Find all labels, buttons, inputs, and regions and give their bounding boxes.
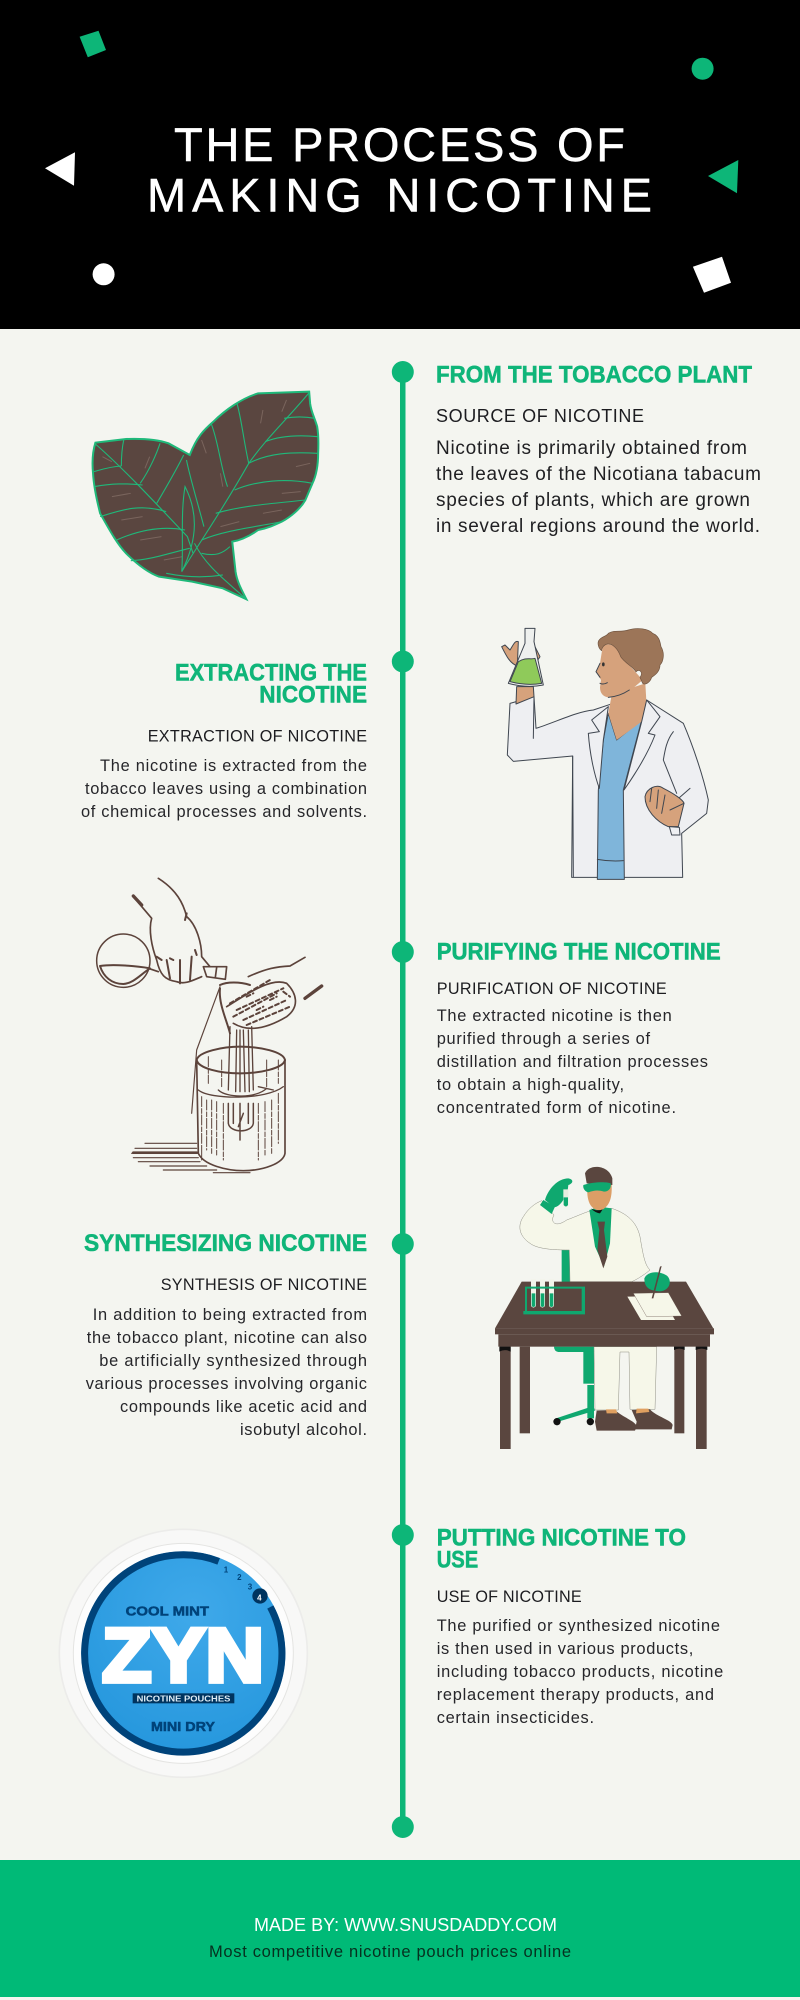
- person: [520, 1167, 673, 1431]
- title: THE PROCESS OF: [174, 118, 625, 171]
- heading: PUTTING NICOTINE TO: [437, 1525, 686, 1552]
- chair: [553, 1250, 629, 1425]
- subheading: SOURCE OF NICOTINE: [436, 406, 644, 426]
- body: species of plants, which are grown: [436, 490, 750, 511]
- body: replacement therapy products, and: [437, 1686, 714, 1704]
- body: purified through a series of: [437, 1030, 650, 1048]
- illustration: ZYN nicotine pouch can: NICOTINE POUCHES: [137, 1694, 231, 1703]
- body: [436, 438, 761, 537]
- heading: USE: [437, 1547, 478, 1574]
- icon: white circle: [93, 263, 115, 285]
- body: [437, 1007, 708, 1117]
- step 4 text: [84, 1230, 367, 1439]
- icon: green rotated square: [80, 31, 106, 57]
- subheading: EXTRACTION OF NICOTINE: [148, 728, 367, 746]
- test tube rack: [523, 1279, 585, 1314]
- body: [81, 757, 367, 821]
- step 5 text: [437, 1525, 723, 1727]
- heading: [437, 1525, 686, 1574]
- body: [86, 1306, 367, 1439]
- illustration: ZYN nicotine pouch can: ZYN: [102, 1613, 264, 1698]
- subheading: SYNTHESIS OF NICOTINE: [161, 1276, 367, 1294]
- illustration: ZYN nicotine pouch can: COOL MINT: [126, 1603, 209, 1618]
- footer credit: MADE BY: WWW.SNUSDADDY.COM: [254, 1915, 557, 1935]
- heading: FROM THE TOBACCO PLANT: [436, 362, 752, 389]
- step 1 text: [436, 362, 761, 537]
- header banner: [0, 0, 800, 329]
- body: The extracted nicotine is then: [437, 1007, 672, 1025]
- body: including tobacco products, nicotine: [437, 1663, 723, 1681]
- writing hand: [644, 1266, 670, 1298]
- step 3 text: [437, 938, 721, 1117]
- body: certain insecticides.: [437, 1709, 594, 1727]
- heading: SYNTHESIZING NICOTINE: [84, 1230, 367, 1257]
- timeline: [392, 361, 414, 1838]
- illustration: tobacco leaves: [92, 392, 318, 599]
- body: in several regions around the world.: [436, 516, 760, 537]
- subheading: PURIFICATION OF NICOTINE: [437, 980, 667, 998]
- body: concentrated form of nicotine.: [437, 1099, 676, 1117]
- subheading: USE OF NICOTINE: [437, 1588, 582, 1606]
- icon: white triangle: [45, 152, 75, 186]
- icon: white rotated square: [693, 257, 731, 293]
- body: tobacco leaves using a combination: [85, 780, 367, 798]
- body: various processes involving organic: [86, 1375, 367, 1393]
- illustration: pouring flask into filter: [97, 878, 322, 1173]
- body: is then used in various products,: [437, 1640, 693, 1658]
- step 2 text: [81, 660, 367, 821]
- illustration: ZYN nicotine pouch can: 1: [224, 1565, 229, 1574]
- heading: [175, 660, 367, 708]
- papers: [627, 1293, 682, 1320]
- body: In addition to being extracted from: [93, 1306, 367, 1324]
- footer tagline: Most competitive nicotine pouch prices online: [209, 1943, 571, 1961]
- icon: green triangle: [708, 160, 738, 193]
- icon: green circle: [692, 58, 714, 80]
- body: the tobacco plant, nicotine can also: [87, 1329, 367, 1347]
- body: The purified or synthesized nicotine: [437, 1617, 720, 1635]
- body: to obtain a high-quality,: [437, 1076, 624, 1094]
- body: the leaves of the Nicotiana tabacum: [436, 464, 761, 485]
- body: compounds like acetic acid and: [120, 1398, 367, 1416]
- heading: EXTRACTING THE: [175, 660, 367, 687]
- illustration: ZYN nicotine pouch can: MINI DRY: [151, 1720, 216, 1734]
- title: [147, 118, 652, 222]
- illustration: ZYN nicotine pouch can: [59, 1529, 307, 1777]
- body: distillation and filtration processes: [437, 1053, 708, 1071]
- body: Nicotine is primarily obtained from: [436, 438, 747, 459]
- title: MAKING NICOTINE: [147, 169, 652, 222]
- desk: [495, 1282, 714, 1449]
- body: of chemical processes and solvents.: [81, 803, 367, 821]
- body: be artificially synthesized through: [99, 1352, 367, 1370]
- illustration: ZYN nicotine pouch can: 3: [248, 1582, 253, 1591]
- heading: NICOTINE: [259, 681, 367, 708]
- illustration: ZYN nicotine pouch can: 2: [237, 1573, 242, 1582]
- heading: PURIFYING THE NICOTINE: [437, 938, 721, 965]
- body: The nicotine is extracted from the: [100, 757, 367, 775]
- illustration: scientist with flask: [502, 628, 708, 879]
- illustration: ZYN nicotine pouch can: 4: [257, 1593, 262, 1602]
- body: [437, 1617, 723, 1727]
- body: isobutyl alcohol.: [240, 1421, 367, 1439]
- footer band: [0, 1860, 800, 1997]
- illustration: scientist at desk: [495, 1167, 714, 1449]
